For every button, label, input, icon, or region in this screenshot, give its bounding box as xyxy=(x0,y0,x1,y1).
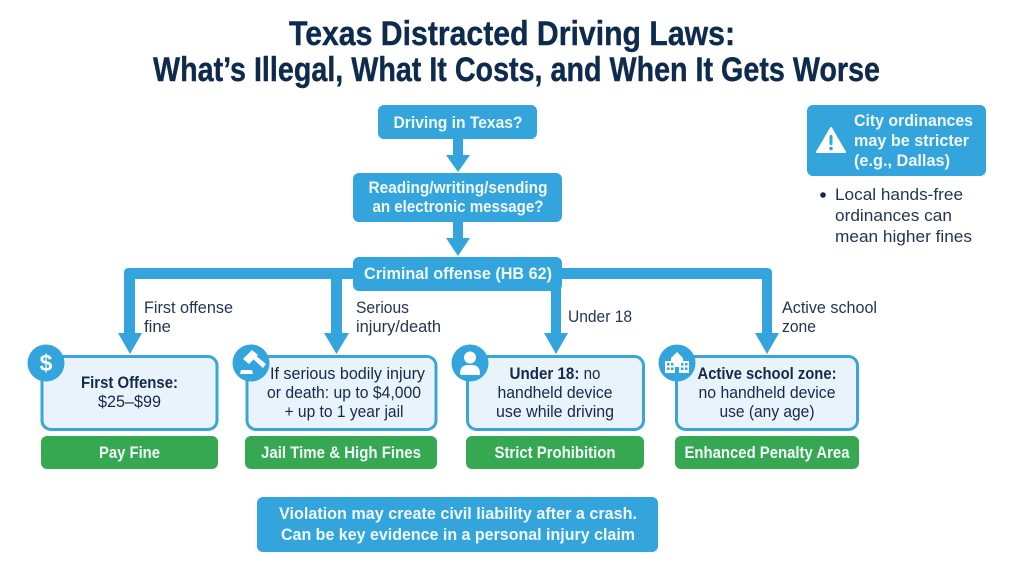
branch label: serious injury/death: injury/death xyxy=(356,317,441,336)
panel: under 18: Under 18: no xyxy=(510,364,600,383)
panel: first offense: First Offense: xyxy=(81,373,178,392)
callout: civil liability xyxy=(257,497,658,552)
branch label: first offense fine: fine xyxy=(144,317,171,336)
branch label: active school zone: zone xyxy=(782,317,816,336)
arrow: message to criminal offense xyxy=(446,221,470,256)
callout: civil liability: Can be key evidence in a personal injury claim xyxy=(281,526,635,544)
icon: gavel xyxy=(232,344,270,382)
outcome: enhanced penalty area: Enhanced Penalty Area xyxy=(684,444,850,462)
panel: first offense xyxy=(42,356,217,430)
outcome: jail time and high fines xyxy=(245,436,437,469)
panel: under 18 xyxy=(468,356,644,430)
panel: active school zone: no handheld device xyxy=(698,383,836,402)
icon: dollar xyxy=(28,344,64,382)
outcome: strict prohibition: Strict Prohibition xyxy=(494,444,616,462)
box: electronic message question xyxy=(353,173,562,222)
callout: civil liability: Violation may create civil liability after a crash. xyxy=(279,505,637,523)
panel: serious injury: If serious bodily injury xyxy=(270,364,425,383)
box: electronic message question: Reading/writing/sending xyxy=(368,179,548,197)
box: criminal offense xyxy=(353,257,562,291)
callout: city ordinances xyxy=(807,105,986,176)
box: driving in Texas xyxy=(378,105,537,139)
outcome: pay fine: Pay Fine xyxy=(99,444,160,462)
arrow: criminal offense to school zone xyxy=(556,268,779,354)
box: electronic message question: an electronic message? xyxy=(372,198,544,216)
note: local ordinances bullet xyxy=(820,185,972,246)
panel: active school zone xyxy=(676,356,858,430)
panel: first offense: $25–$99 xyxy=(98,392,161,411)
arrow: criminal offense to first offense xyxy=(118,268,360,354)
panel: active school zone: Active school zone: xyxy=(698,364,836,383)
branch label: serious injury/death xyxy=(356,298,441,336)
box: driving in Texas: Driving in Texas? xyxy=(394,114,522,132)
title: What’s Illegal, What It Costs, and When It Gets Worse xyxy=(153,51,880,89)
title: Texas Distracted Driving Laws: xyxy=(289,15,735,53)
panel: under 18: use while driving xyxy=(496,402,614,421)
outcome: enhanced penalty area xyxy=(675,436,859,469)
title xyxy=(153,15,880,89)
branch label: under 18: Under 18 xyxy=(568,307,632,326)
branch label: first offense fine xyxy=(144,298,233,336)
icon: person xyxy=(452,344,488,382)
branch label: serious injury/death: Serious xyxy=(356,298,409,317)
callout: city ordinances: may be stricter xyxy=(854,132,970,150)
note: local ordinances bullet: ordinances can xyxy=(835,206,952,225)
outcome: pay fine xyxy=(41,436,218,469)
arrow: criminal offense to serious injury xyxy=(324,279,349,354)
box: criminal offense: Criminal offense (HB 62) xyxy=(364,265,552,283)
panel: serious injury: + up to 1 year jail xyxy=(284,402,404,421)
note: local ordinances bullet: Local hands-free xyxy=(835,185,963,204)
panel: serious injury xyxy=(247,356,436,430)
icon: dollar: $ xyxy=(40,350,53,376)
outcome: jail time and high fines: Jail Time & High Fines xyxy=(261,444,421,462)
callout: city ordinances: City ordinances xyxy=(854,112,973,130)
icon: school xyxy=(658,344,696,382)
arrow: driving to message xyxy=(446,138,470,172)
branch label: active school zone xyxy=(782,298,877,336)
callout: city ordinances: (e.g., Dallas) xyxy=(854,152,950,170)
panel: serious injury: or death: up to $4,000 xyxy=(267,383,421,402)
panel: under 18: handheld device xyxy=(498,383,612,402)
branch label: first offense fine: First offense xyxy=(144,298,233,317)
panel: active school zone: use (any age) xyxy=(720,402,814,421)
outcome: strict prohibition xyxy=(466,436,644,469)
note: local ordinances bullet: mean higher fines xyxy=(835,227,972,246)
arrow: criminal offense to under 18 xyxy=(544,285,568,354)
branch label: active school zone: Active school xyxy=(782,298,877,317)
